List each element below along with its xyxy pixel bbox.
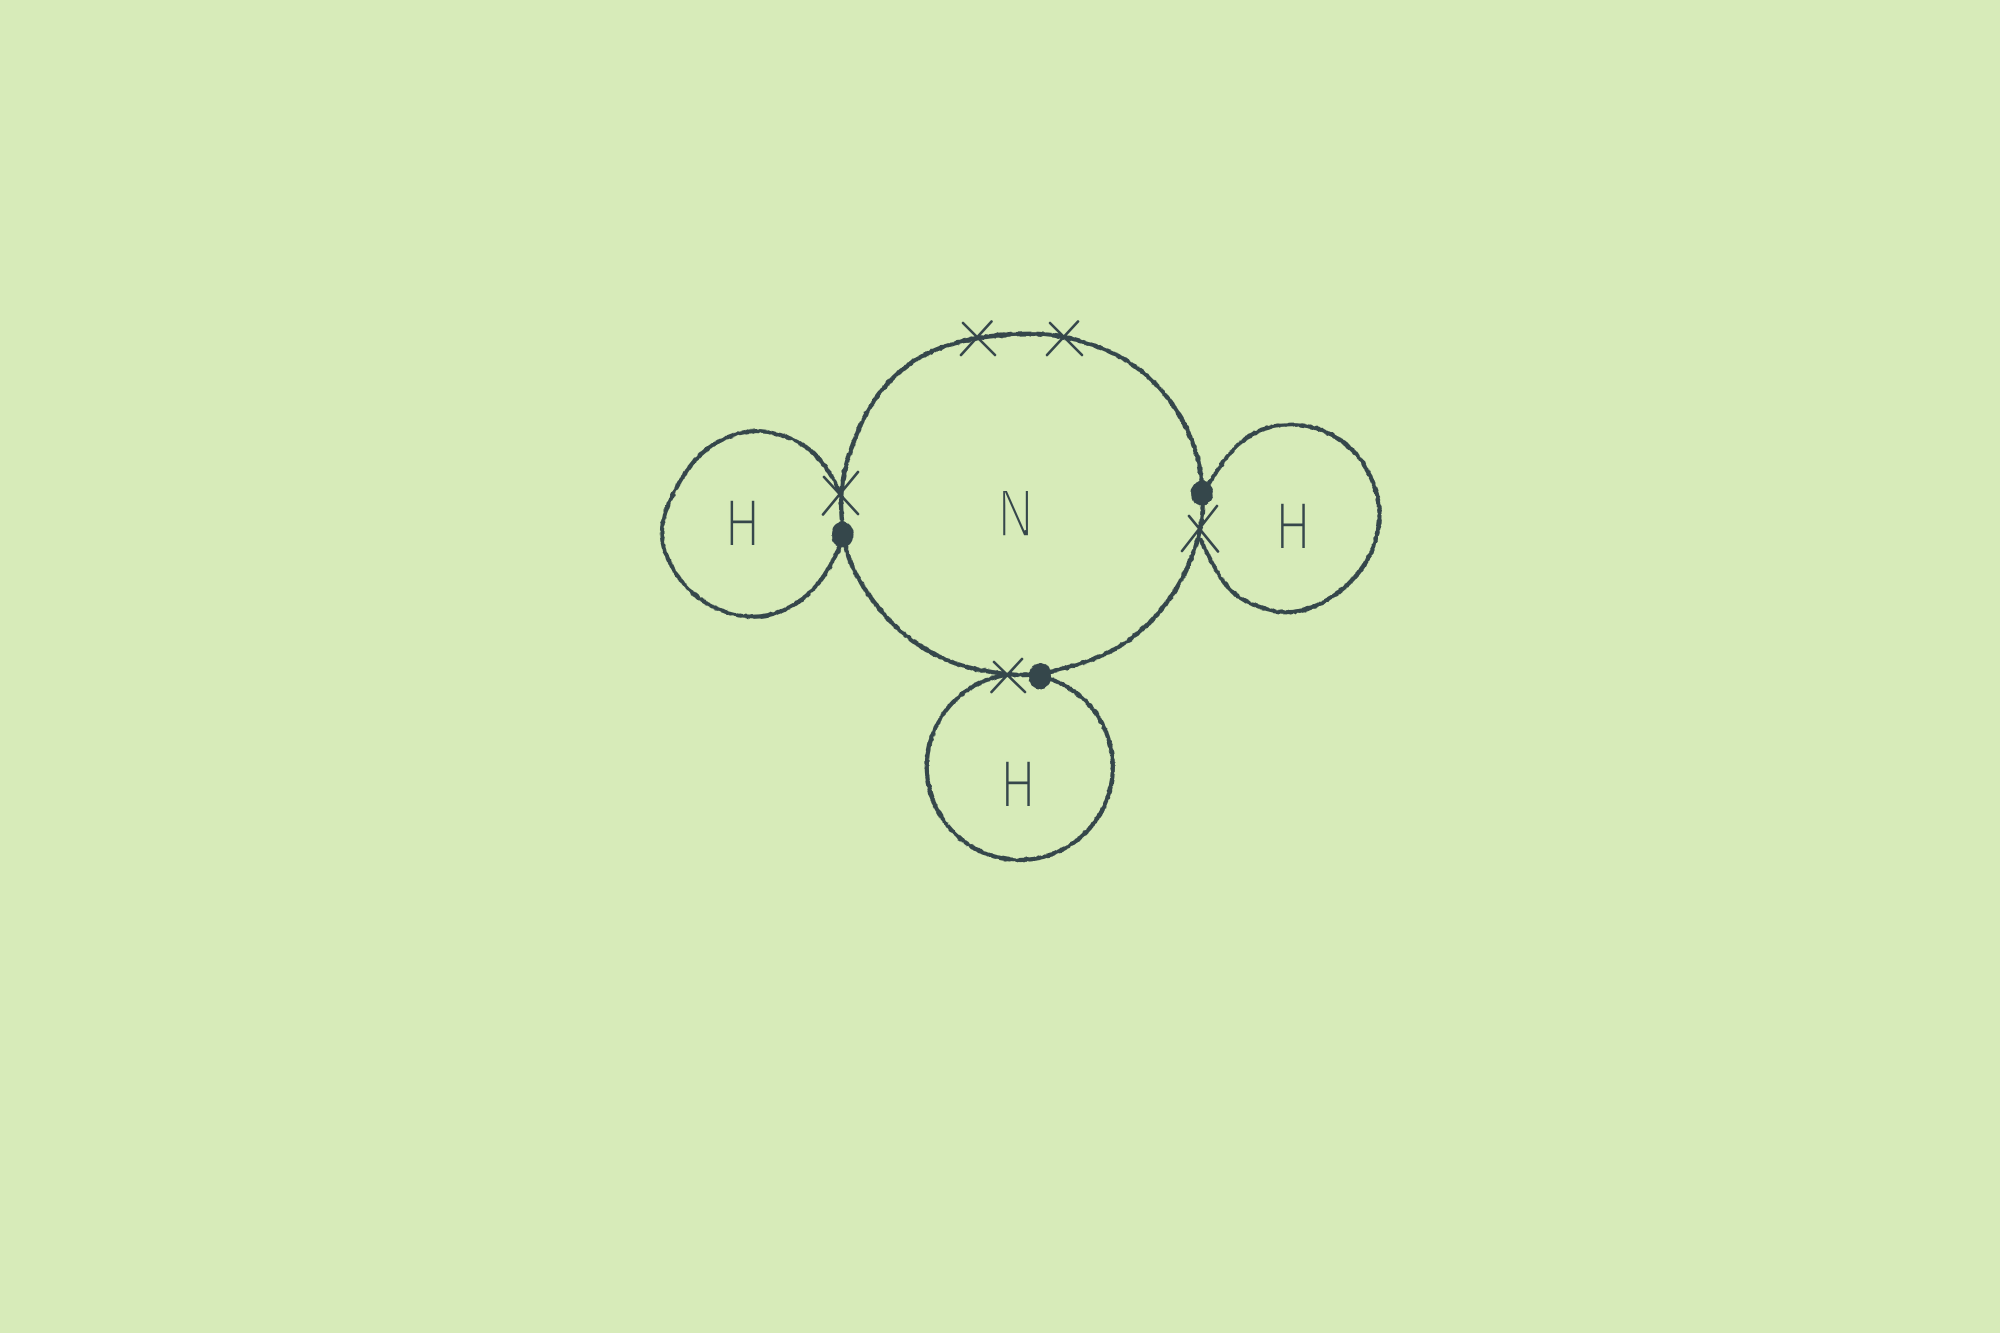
atom shells and electrons [662, 334, 1379, 860]
shell: right hydrogen [1201, 425, 1379, 612]
shell: nitrogen [841, 334, 1203, 675]
shell: bottom hydrogen [927, 675, 1113, 860]
label: nitrogen: N [998, 476, 1033, 552]
electron cross: bottom bond [992, 659, 1025, 692]
label: right hydrogen: H [1277, 489, 1309, 564]
label: bottom hydrogen: H [1002, 747, 1034, 822]
shell: left hydrogen [662, 431, 841, 617]
electron cross: right bond [1182, 506, 1218, 552]
electron dot: bottom bond [1028, 663, 1052, 689]
electron cross: left bond [823, 472, 858, 514]
electron cross: top right lone pair [1047, 322, 1082, 355]
electron dot: left bond [832, 522, 854, 548]
label: left hydrogen: H [726, 486, 759, 561]
electron dot: right bond [1191, 480, 1213, 506]
electron cross: top left lone pair [961, 322, 995, 355]
